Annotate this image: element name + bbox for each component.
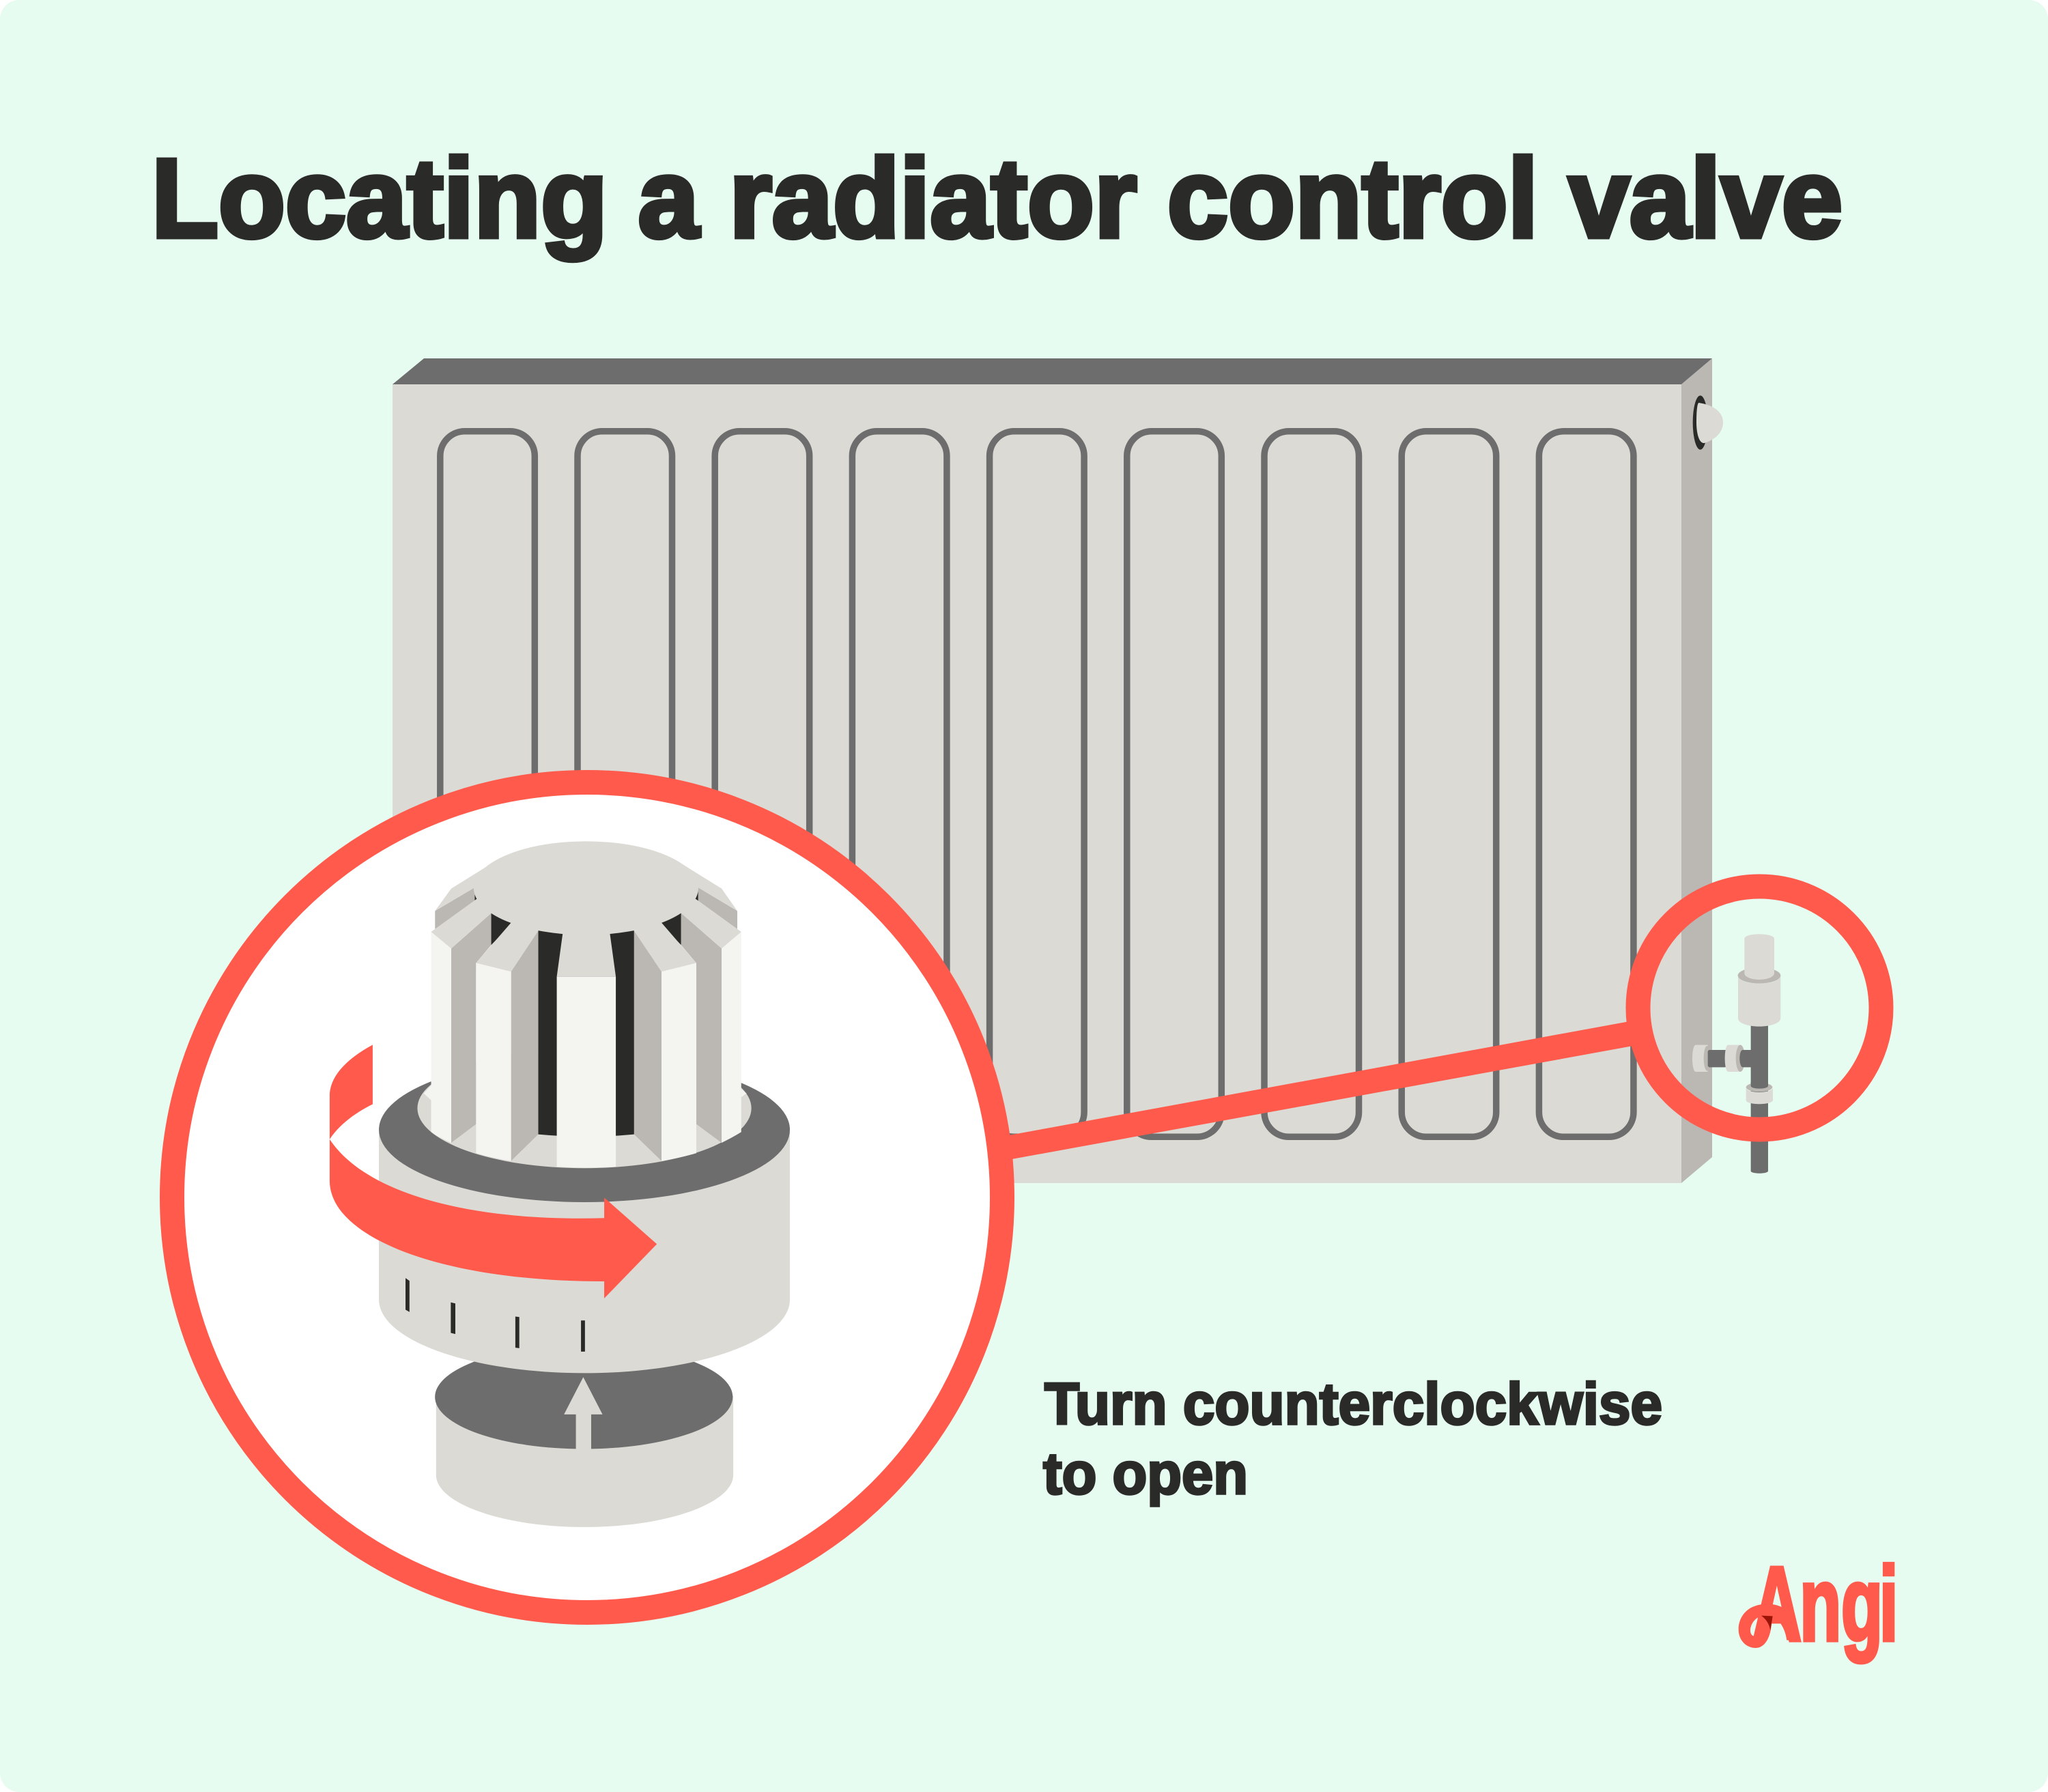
- logo wordmark: Angi: [1752, 1545, 1898, 1663]
- thermostat base and drum: [379, 1048, 790, 1527]
- left collar: [1692, 1045, 1726, 1072]
- middle collar: [1725, 1045, 1752, 1072]
- shaded side faces: [435, 887, 737, 1161]
- thermostat knob: [424, 841, 746, 1167]
- callout connector line: [997, 1021, 1635, 1162]
- bright faces: [424, 932, 746, 1167]
- caption line 2: to open: [1043, 1441, 1248, 1507]
- scale ticks: [406, 1278, 585, 1352]
- radiator: [393, 358, 1723, 1183]
- logo loop: [1739, 1604, 1790, 1648]
- drum top ring: [379, 1057, 790, 1202]
- radiator front face: [393, 384, 1681, 1183]
- small callout ring: [1638, 886, 1881, 1129]
- knob cap: [431, 841, 741, 977]
- dark slots: [474, 887, 698, 1137]
- drum inner top: [417, 1048, 752, 1168]
- lower cylinder: [436, 1396, 733, 1527]
- Angi logo: [1739, 1545, 1898, 1663]
- thermostat valve illustration: [330, 841, 790, 1527]
- title: Locating a radiator control valve: [152, 136, 1843, 261]
- radiator side face: [1681, 358, 1712, 1183]
- radiator top face: [393, 358, 1712, 384]
- magnified circle: [172, 782, 1002, 1612]
- bleed valve: [1693, 395, 1723, 450]
- control valve on pipe: [1692, 934, 1780, 1174]
- pipe: [1751, 1019, 1768, 1174]
- lower cylinder top: [435, 1345, 733, 1449]
- valve head lower body: [1738, 934, 1780, 1027]
- radiator fins: [440, 431, 1634, 1137]
- caption: [1043, 1371, 1662, 1507]
- lower collar: [1746, 1082, 1773, 1104]
- up arrow marker: [564, 1377, 603, 1451]
- caption line 1: Turn counterclockwise: [1044, 1371, 1662, 1437]
- rotation arrow: [330, 1044, 657, 1298]
- upper drum: [379, 1130, 790, 1373]
